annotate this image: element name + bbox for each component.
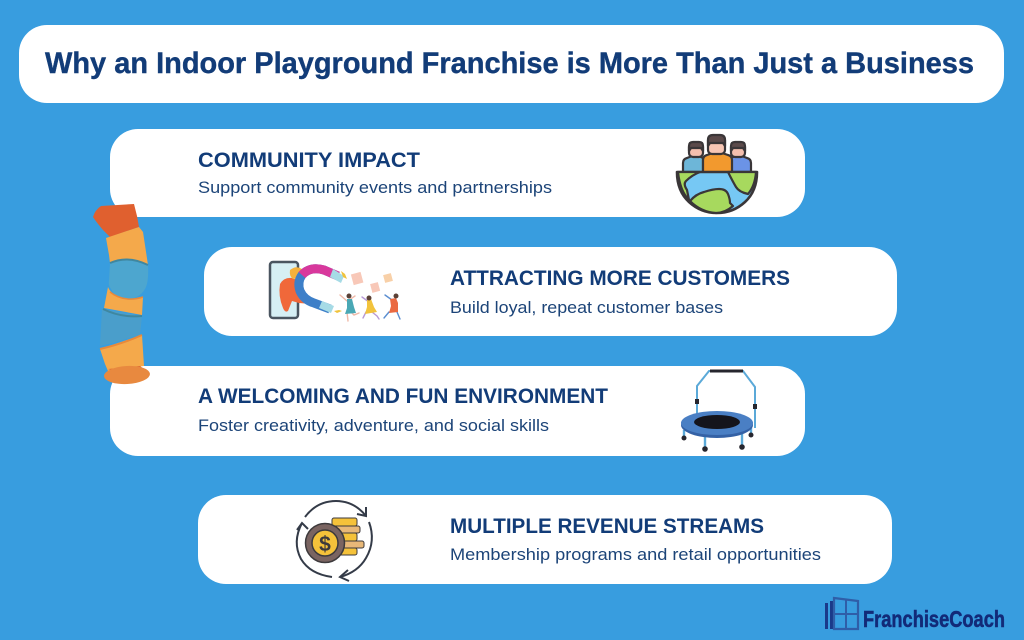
- heading: community impact: COMMUNITY IMPACT: [198, 149, 420, 172]
- heading: welcoming environment: A WELCOMING AND FUN ENVIRONMENT: [198, 385, 608, 408]
- panel: attracting more customers: [204, 247, 897, 336]
- panel: welcoming environment: [110, 366, 805, 456]
- heading: multiple revenue streams: MULTIPLE REVENUE STREAMS: [450, 515, 764, 538]
- text: attracting more customers: Build loyal, repeat customer bases: [450, 298, 723, 317]
- icon: people on globe: [677, 135, 757, 213]
- icon: coins and arrows: $: [319, 533, 331, 556]
- panel: multiple revenue streams: [198, 495, 892, 584]
- text: community impact: Support community events and partnerships: [198, 178, 552, 197]
- icon: tube slide: [93, 204, 150, 385]
- title: [19, 25, 1004, 103]
- title: Why an Indoor Playground Franchise is More Than Just a Business: [45, 47, 974, 80]
- heading: attracting more customers: ATTRACTING MORE CUSTOMERS: [450, 267, 790, 290]
- logo: FranchiseCoach: [825, 598, 1005, 632]
- text: welcoming environment: Foster creativity, adventure, and social skills: [198, 416, 549, 435]
- icon: trampoline: [681, 371, 757, 452]
- panel: community impact: [110, 129, 805, 217]
- text: multiple revenue streams: Membership programs and retail opportunities: [450, 545, 821, 564]
- icon: coins and arrows: [297, 501, 372, 581]
- icon: magnet attracting customers: [270, 262, 400, 321]
